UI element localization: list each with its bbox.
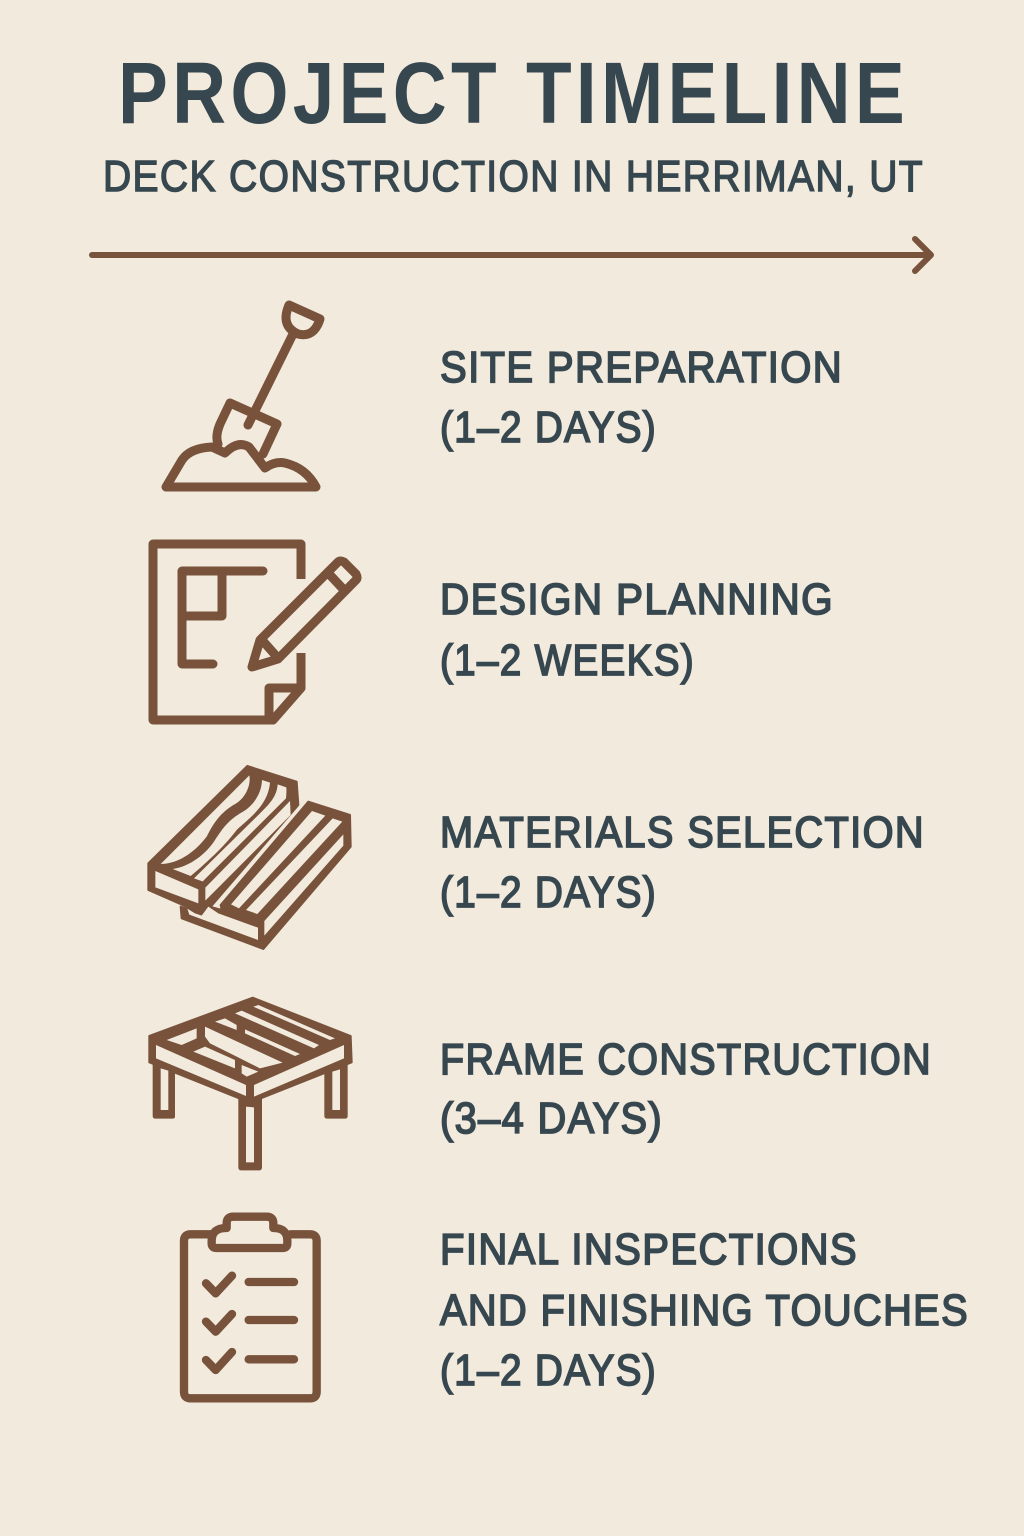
- icon: lumber boards: [148, 766, 351, 949]
- icon: deck frame: [149, 998, 352, 1169]
- step 2 label: DESIGN PLANNING: [440, 575, 834, 624]
- step 4 label: FRAME CONSTRUCTION: [440, 1035, 932, 1084]
- icon: clipboard checklist: [184, 1217, 317, 1398]
- step 1 label: SITE PREPARATION: [440, 343, 843, 392]
- step 5 label: AND FINISHING TOUCHES: [440, 1286, 969, 1335]
- step 5 label: [440, 1225, 969, 1395]
- icon: shovel in dirt: [166, 305, 320, 487]
- step 1 label: (1–2 DAYS): [440, 403, 657, 452]
- step 5 label: FINAL INSPECTIONS: [440, 1225, 858, 1274]
- step 2 label: [440, 575, 834, 685]
- step 1 label: [440, 343, 843, 452]
- step 3 label: (1–2 DAYS): [440, 868, 657, 917]
- step 4 label: (3–4 DAYS): [440, 1094, 663, 1143]
- title: PROJECT TIMELINE: [118, 45, 909, 142]
- step 3 label: [440, 808, 925, 917]
- step 3 label: MATERIALS SELECTION: [440, 808, 925, 857]
- subtitle: DECK CONSTRUCTION IN HERRIMAN, UT: [103, 152, 924, 201]
- step 2 label: (1–2 WEEKS): [440, 636, 695, 685]
- arrow: timeline: [92, 239, 931, 271]
- step 5 label: (1–2 DAYS): [440, 1346, 657, 1395]
- step 4 label: [440, 1035, 932, 1143]
- icon: design plan with pencil: [153, 544, 357, 720]
